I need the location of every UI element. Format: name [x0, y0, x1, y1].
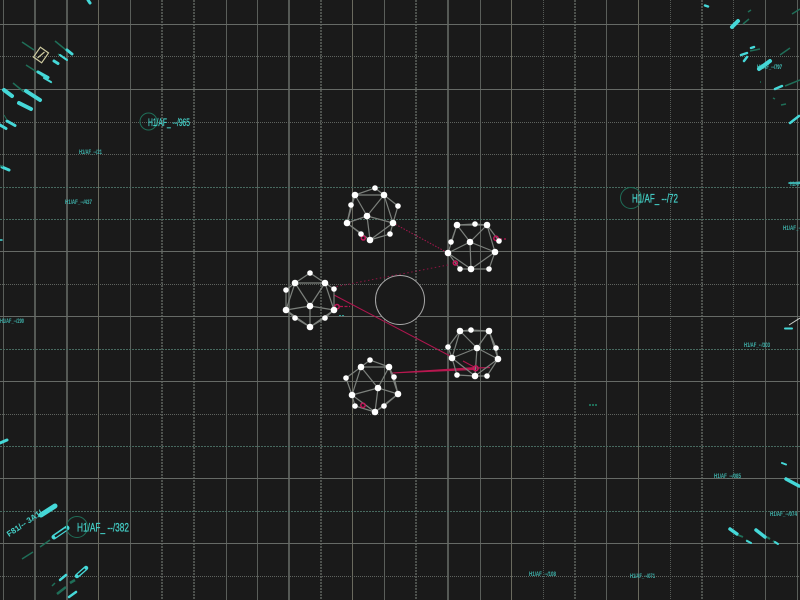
small node labels: H1/AF_--/437: [65, 200, 92, 206]
small node labels: H1/AF_--/108: [529, 572, 556, 578]
left edge dashes: [0, 240, 7, 443]
small node labels: H1/AF_--/085: [714, 474, 741, 480]
node cluster: upper right: [445, 221, 502, 272]
small stray mark: [589, 404, 598, 406]
central hollow circle: [376, 276, 424, 324]
label: H1/AF --/965: [140, 113, 190, 130]
node cluster: lower right: [445, 327, 501, 379]
pink link lines: [334, 223, 507, 374]
top-right cluster of route dashes: [705, 6, 800, 183]
node cluster: bottom: [343, 357, 401, 415]
icon: outlined route marker: [33, 47, 49, 63]
small node labels: [0, 150, 800, 580]
top-right cluster of route dashes: H1/AF_--/797: [757, 65, 782, 71]
small node labels: H1/AF_--/303: [744, 343, 770, 349]
top-left cluster of route dashes: [0, 0, 90, 170]
small node labels: H1/AF_--/290: [0, 319, 24, 325]
label: H1/AF --/382: H1/AF_ --/382: [77, 520, 129, 534]
small node labels: H1/AF_--/071: [630, 574, 655, 580]
label: H1/AF --/965: H1/AF_ --/965: [148, 117, 190, 129]
label: H1/AF --/382: [66, 516, 129, 538]
label: H1/AF --/72: [620, 188, 678, 208]
bottom-left cluster of route dashes: [5, 506, 86, 597]
small node labels: H1/AF_--/21: [79, 150, 102, 156]
label: H1/AF --/72: H1/AF_ --/72: [632, 194, 678, 206]
node cluster: left: [283, 270, 339, 330]
rotated route label: F81/-- 3A1/: [5, 508, 45, 539]
bottom-right cluster of route dashes: [730, 463, 799, 544]
right edge connector: [785, 318, 800, 328]
node cluster: upper left: [344, 185, 401, 243]
